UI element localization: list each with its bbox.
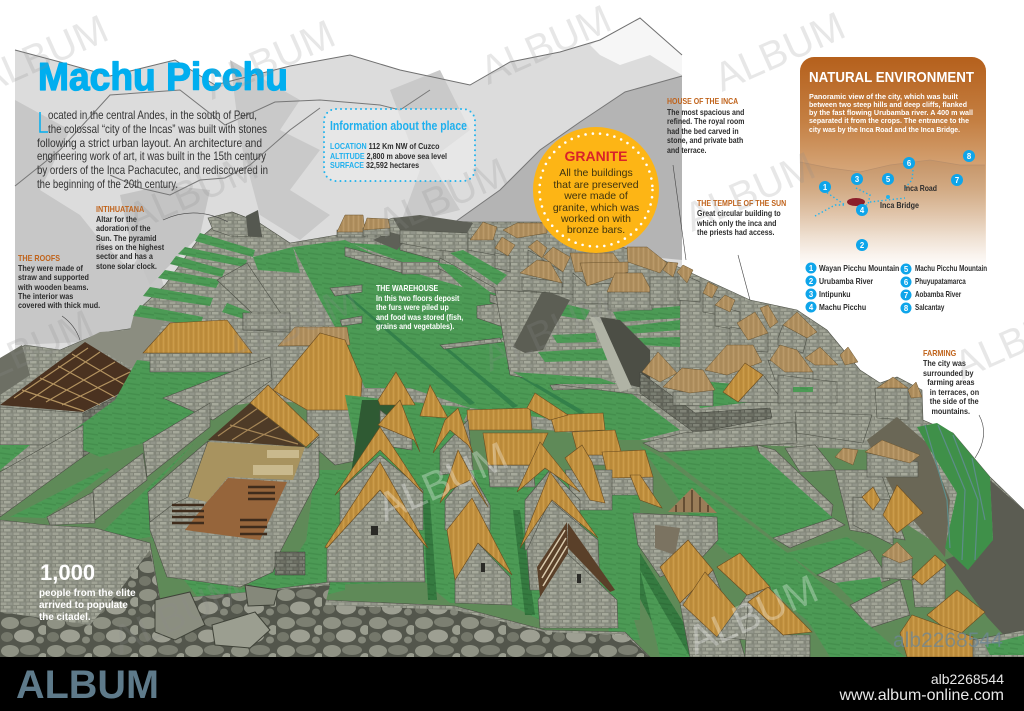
location map: 8 [967,152,972,161]
label: Intihuatana: rises on the highest [96,242,164,252]
lattice roof house [0,342,146,457]
location map: Inca Bridge [880,201,920,210]
granite callout: that are preserved [553,179,639,191]
label: Intihuatana: INTIHUATANA [96,204,144,214]
label: House of the Inca: The most spacious and [667,107,745,117]
label: Farming: the side of the [930,396,979,406]
foreground houses [660,540,812,657]
watermark: ALBUM [221,277,365,373]
information box: Information about the place [330,119,467,133]
label: Intihuatana: sector and has a [96,251,153,261]
gable house A [325,427,428,582]
callout: 1,000 people: 1,000 [40,560,95,585]
location map: 3 [855,175,860,184]
label: The warehouse [376,283,463,331]
label: The roofs: THE ROOFS [18,253,60,263]
label: The roofs: They were made of [18,263,83,273]
label: House of the Inca: stone, and private bath [667,135,743,145]
round building with lattice gable [633,488,718,577]
pyramid terraces of Intihuatana [133,210,300,332]
label: The roofs [17,253,100,340]
intro text: ocated in the central Andes, in the south of Peru, [48,108,257,122]
website: www.album-online.com [838,687,1004,704]
granite callout [533,127,659,253]
watermark: ALBUM [708,4,852,100]
legend: Machu Picchu Mountain [915,264,987,273]
legend [806,262,987,314]
legend: 1 [809,264,814,273]
information box: LOCATION 112 Km NW of Cuzco [330,141,440,151]
legend: Intipunku [819,290,851,299]
cutaway warehouse [148,385,319,587]
location map: 2 [860,241,865,250]
label: Temple of the Sun: the priests had access. [697,227,775,237]
intro text: by orders of the Inca Pachacutec, and rediscovered in [37,163,268,177]
label: House of the Inca: refined. The royal room [667,116,744,126]
central green fields [293,240,680,440]
location map [800,150,985,255]
foreground stone walls [0,520,650,657]
lower ground cover [0,400,1024,657]
terrain base [0,212,1024,657]
label: Temple of the Sun: Great circular building to [697,208,781,218]
panel text: city was by the Inca Road and the Inca Bridge. [809,125,960,134]
label: Temple of the Sun: which only the inca and [696,218,777,228]
legend: Machu Picchu [819,303,867,312]
label: The roofs: covered with thick mud. [18,300,100,310]
information box: ALTITUDE 2,800 m above sea level [330,151,447,161]
panel text: separated it from the crops. The entrance to the [809,116,969,125]
label: Intihuatana: adoration of the [96,223,151,233]
watermark: ALBUM [106,567,250,663]
stepped terraces with staircase [495,290,680,400]
legend: Salcantay [915,303,944,312]
right arc houses [663,262,817,353]
panel heading: NATURAL ENVIRONMENT [809,70,974,86]
long terrace walls [0,403,210,547]
stone courtyards lower right [663,445,910,628]
gable houses: rear row [378,372,490,530]
panel text: Panoramic view of the city, which was built [809,92,958,101]
location map: 5 [886,175,891,184]
legend: Aobamba River [915,290,961,299]
label: House of the Inca [667,96,745,260]
callout: 1,000 people: people from the elite [39,588,136,599]
watermark: ALBUM [121,144,265,240]
image id ghost on scene: alb2268544 [893,629,1003,652]
watermark: ALBUM [371,434,515,530]
granite callout: GRANITE [564,148,628,164]
granite callout: All the buildings [559,167,633,179]
label: House of the Inca: had the bed carved in [667,126,739,136]
watermark: ALBUM [198,12,342,108]
label: Intihuatana [96,204,228,271]
title: Machu Picchu [38,56,288,99]
upper terraces [345,215,540,318]
label: The warehouse: In this two floors deposit [376,293,460,303]
label: Farming: The city was [923,358,966,368]
label: Farming: surrounded by [923,368,974,378]
legend: 7 [904,291,908,300]
diagonal green strips [600,445,905,657]
panel text [809,92,973,134]
watermark: ALBUM [476,284,620,380]
panel: natural environment [800,57,987,314]
legend: Phuyupatamarca [915,277,966,286]
legend: 3 [809,290,814,299]
legend: 6 [904,278,909,287]
image id: alb2268544 [931,671,1004,687]
label: Temple of the Sun [696,198,787,300]
intro text: the beginning of the 20th century. [37,177,178,191]
gable house C with rafters [517,442,618,628]
intro text [37,108,268,191]
watermark: ALBUM [681,567,825,663]
panel text: between two steep hills and deep cliffs, flanked [809,100,967,109]
large thatched house [273,333,362,465]
location map: Inca Road [904,184,937,193]
location map: 7 [955,176,959,185]
label: Farming: FARMING [923,348,956,358]
label: The warehouse: grains and vegetables). [376,321,454,331]
intro text: the colossal “city of the Incas” was built with stones [48,122,267,136]
altar building [208,210,262,237]
green around central houses [150,395,640,620]
legend: 2 [809,277,814,286]
top houses [337,215,680,310]
rocks behind left house [0,310,165,395]
information box [324,109,475,181]
label: Farming: mountains. [932,406,970,416]
information box: SURFACE 32,592 hectares [330,160,420,170]
granite callout: worked on with [560,213,631,225]
flat roofed houses centre [467,393,662,510]
label: The roofs: straw and supported [18,272,89,282]
label: Farming: farming areas [927,377,975,387]
legend: Wayan Picchu Mountain [819,264,900,273]
panel text: by the fast flowing Urubamba river. A 400 m wall [809,108,973,117]
callout: 1,000 people [39,560,136,623]
callout: 1,000 people: arrived to populate [39,600,128,611]
label: House of the Inca: HOUSE OF THE INCA [667,96,739,106]
label: Intihuatana: Sun. The pyramid [96,233,157,243]
legend: 5 [904,265,909,274]
label: House of the Inca: and terrace. [667,145,706,155]
label: Farming: in terraces, on [930,387,979,397]
label: The roofs: with wooden beams. [17,282,89,292]
intro text: engineering work of art, it was built in the 15th century [37,149,266,163]
footer logo: ALBUM [16,663,159,707]
location map: 6 [907,159,912,168]
location map: 1 [823,183,828,192]
granite callout: granite, which was [553,202,639,214]
label: The warehouse: THE WAREHOUSE [376,283,438,293]
legend: 4 [809,303,814,312]
label: Farming [923,348,984,458]
label: Intihuatana: stone solar clock. [96,261,157,271]
granite callout: were made of [563,190,628,202]
shadows and back centre green [350,400,535,615]
right side houses [795,440,1024,657]
label: The warehouse: the furs were piled up [376,302,449,312]
granite callout: bronze bars. [567,224,625,236]
flat house and back wall [60,313,350,457]
intro text: following a strict urban layout. An architecture and [37,136,262,150]
label: The roofs: The interior was [18,291,74,301]
legend: Urubamba River [819,277,873,286]
label: Temple of the Sun: THE TEMPLE OF THE SUN [697,198,787,208]
mountain backdrop [15,18,682,350]
footer bar [0,657,1024,711]
legend: 8 [904,304,909,313]
label: The warehouse: and food was stored (fish, [376,312,463,322]
location map: 4 [860,206,865,215]
label: Intihuatana: Altar for the [96,214,137,224]
lower right houses [640,345,922,452]
callout: 1,000 people: the citadel. [39,612,91,623]
right rock and farming terraces [867,417,1024,657]
gable house B [447,498,512,605]
watermark: ALBUM [678,144,822,240]
watermark: ALBUM [371,150,515,246]
